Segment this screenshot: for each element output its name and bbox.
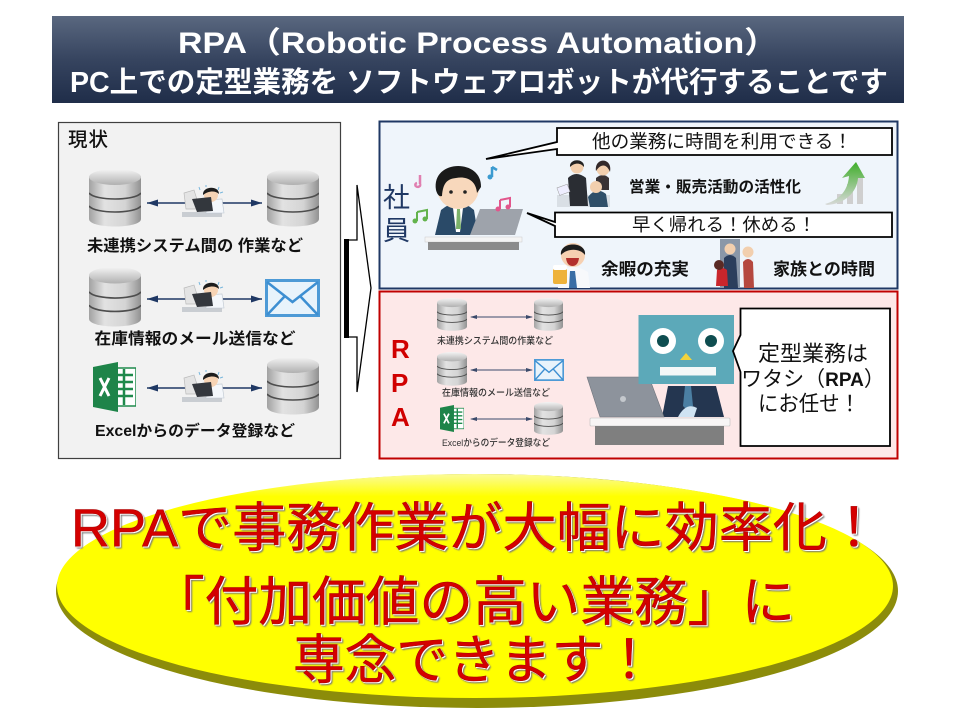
text: fulfilling leisure: 余暇の充実 <box>601 260 689 279</box>
mini row: unlinked systems: 未連携システム間の作業など <box>437 335 553 347</box>
row: Excel entry <box>93 357 319 440</box>
callout: leave it to RPA: ワタシ（RPA） <box>741 368 885 391</box>
employee label: 員 <box>383 216 410 246</box>
row: stock mail <box>89 267 318 348</box>
row: Excel entry: Excelからのデータ登録など <box>95 421 296 440</box>
callout: leave it to RPA: にお任せ！ <box>758 392 860 416</box>
illustration: happy employee <box>412 166 523 250</box>
panel: current state <box>58 122 340 458</box>
panel heading: current state: 現状 <box>68 129 108 151</box>
row: unlinked systems <box>87 169 319 255</box>
conclusion: yellow ellipse <box>56 474 898 708</box>
row: stock mail: 在庫情報のメール送信など <box>94 329 296 348</box>
callout: leave it to RPA <box>733 308 890 446</box>
icon: growth arrow <box>825 162 865 205</box>
icon: family <box>714 239 754 288</box>
title banner: PC上での定型業務を ソフトウェアロボットが代行することです <box>70 65 888 99</box>
title banner: RPA（Robotic Process Automation） <box>178 27 778 60</box>
mini row: Excel entry: Excelからのデータ登録など <box>442 437 550 449</box>
arrow: current to RPA <box>345 185 371 392</box>
conclusion message: 専念できます！ <box>293 631 655 690</box>
panel: RPA <box>380 292 898 458</box>
mini row: stock mail <box>437 352 563 399</box>
row: unlinked systems: 未連携システム間の 作業など <box>87 236 303 255</box>
callout: go home early <box>527 212 892 237</box>
mini row: stock mail: 在庫情報のメール送信など <box>442 387 550 399</box>
text: sales activation: 営業・販売活動の活性化 <box>629 177 801 196</box>
RPA vertical label: P <box>391 368 408 398</box>
title banner <box>52 16 904 103</box>
RPA vertical label: R <box>391 334 410 364</box>
RPA vertical label: A <box>391 402 410 432</box>
icon: sales people <box>557 160 610 207</box>
mini row: unlinked systems <box>437 298 563 347</box>
employee label: 社 <box>383 183 410 213</box>
callout: use time for other work <box>486 128 892 159</box>
conclusion message <box>71 499 881 690</box>
conclusion message: 「付加価値の高い業務」に <box>151 573 795 632</box>
text: family time: 家族との時間 <box>773 259 875 279</box>
callout: go home early: 早く帰れる！休める！ <box>632 215 816 235</box>
callout: leave it to RPA: 定型業務は <box>758 342 868 366</box>
mini row: Excel entry <box>440 402 563 449</box>
arrow thick edge <box>345 240 348 337</box>
conclusion message: RPAで事務作業が大幅に効率化！ <box>71 499 881 558</box>
panel: employee <box>380 122 898 288</box>
illustration: robot at laptop <box>587 315 734 445</box>
callout: use time for other work: 他の業務に時間を利用できる！ <box>592 131 852 152</box>
icon: man with beer <box>553 243 590 288</box>
